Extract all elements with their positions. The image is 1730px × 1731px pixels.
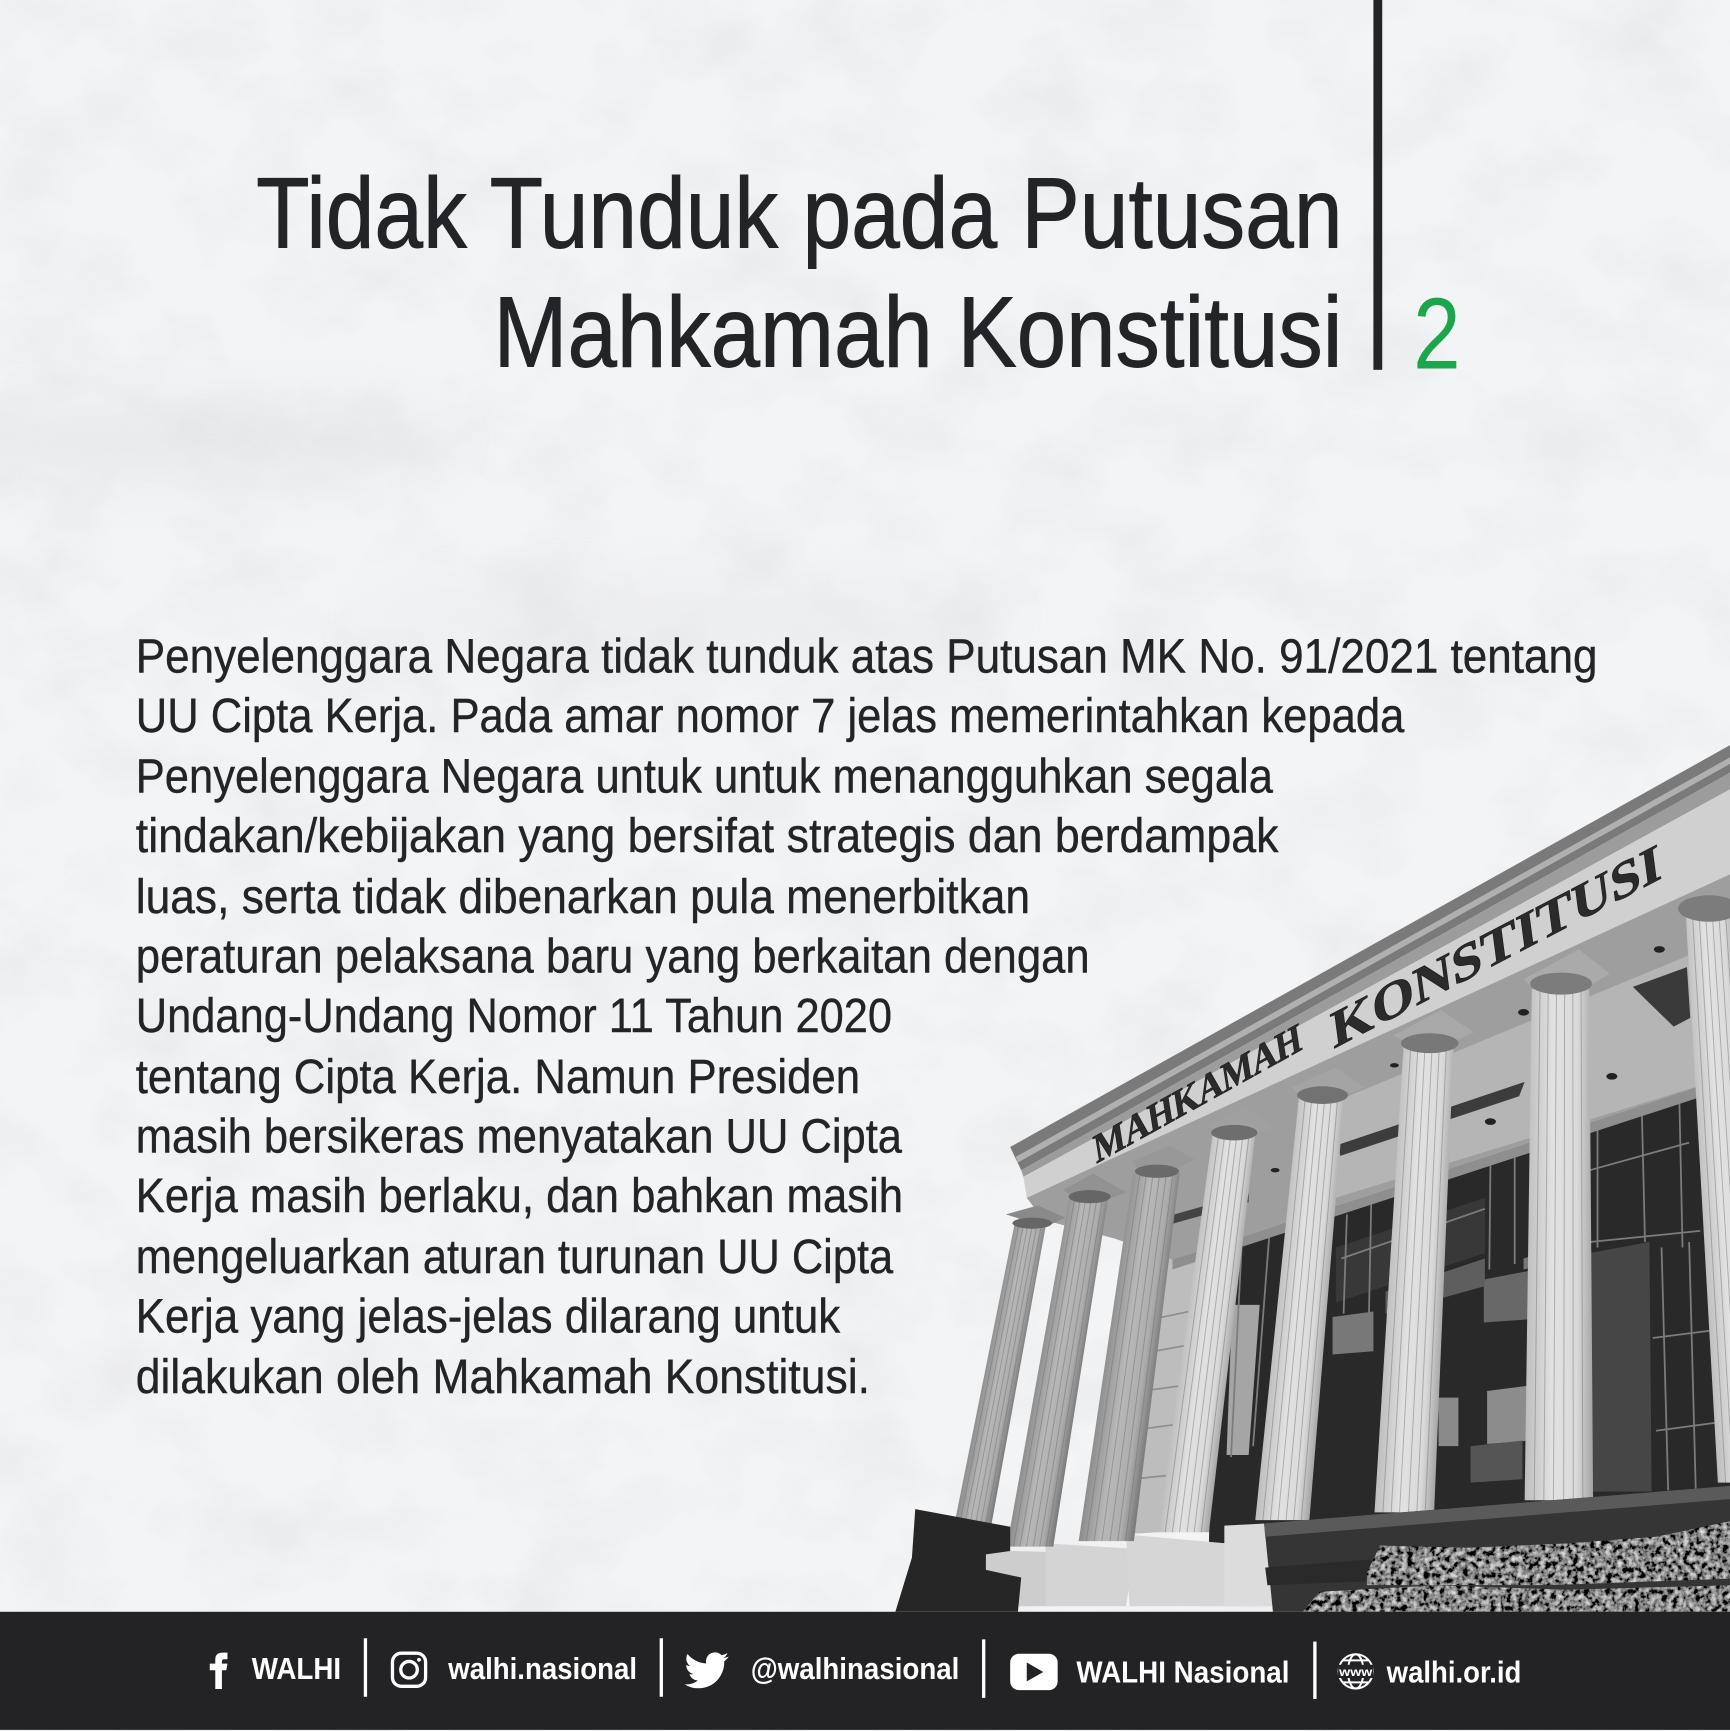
entablature [1010,745,1730,1198]
body text: luas, serta tidak dibenarkan pula menerbitkan [136,870,1030,924]
title [256,157,1342,389]
part number: 2 [1413,277,1461,391]
body text: mengeluarkan aturan turunan UU Cipta [136,1230,894,1284]
body text: peraturan pelaksana baru yang berkaitan dengan [136,930,1090,984]
title: Tidak Tunduk pada Putusan [256,157,1342,269]
divider [982,1639,985,1698]
body text: Kerja yang jelas-jelas dilarang untuk [136,1289,841,1343]
body text: tentang Cipta Kerja. Namun Presiden [136,1050,860,1104]
vertical title rule [1373,0,1382,370]
stone planter wall [1264,1486,1730,1612]
icon: website globe [1338,1654,1373,1688]
frieze lettering [1091,832,1664,1173]
portico ceiling [1027,872,1730,1270]
frieze lettering: KONSTITUSI [1328,832,1664,1060]
body text: dilakukan oleh Mahkamah Konstitusi. [136,1350,870,1404]
body text: masih bersikeras menyatakan UU Cipta [136,1110,903,1164]
label: website: walhi.or.id [1386,1654,1521,1689]
frieze lettering: MAHKAMAH [1091,1014,1304,1173]
column capitals [1006,895,1730,1229]
dark foreground block [895,1509,1021,1612]
label: instagram: walhi.nasional [447,1651,637,1686]
foliage [1297,1518,1730,1612]
icon: instagram [392,1653,426,1686]
icon: facebook [210,1653,227,1689]
body text: Penyelenggara Negara tidak tunduk atas Putusan MK No. 91/2021 tentang [136,629,1598,683]
photo: Mahkamah Konstitusi building [895,745,1730,1612]
label: youtube: WALHI Nasional [1076,1654,1289,1689]
body text: tindakan/kebijakan yang bersifat strategis dan berdampak [136,809,1279,863]
footer bar [0,1612,1730,1730]
label: facebook: WALHI [252,1651,341,1686]
label: twitter: @walhinasional [751,1651,959,1686]
divider [660,1638,663,1697]
title: Mahkamah Konstitusi [493,277,1342,389]
icon: twitter [684,1652,729,1688]
building wall [1121,1236,1238,1534]
body text: Undang-Undang Nomor 11 Tahun 2020 [136,989,892,1043]
divider [1313,1642,1317,1699]
body text: Kerja masih berlaku, dan bahkan masih [136,1169,903,1223]
divider [364,1638,367,1697]
glass facade [1209,1076,1730,1546]
icon: website globe: www [1338,1665,1373,1679]
body text: Penyelenggara Negara untuk untuk menangguhkan segala [136,750,1274,804]
columns [949,915,1730,1549]
body text: UU Cipta Kerja. Pada amar nomor 7 jelas memerintahkan kepada [136,689,1405,743]
icon: youtube [1010,1654,1058,1690]
body text [136,629,1598,1404]
column plinths [928,1523,1273,1606]
